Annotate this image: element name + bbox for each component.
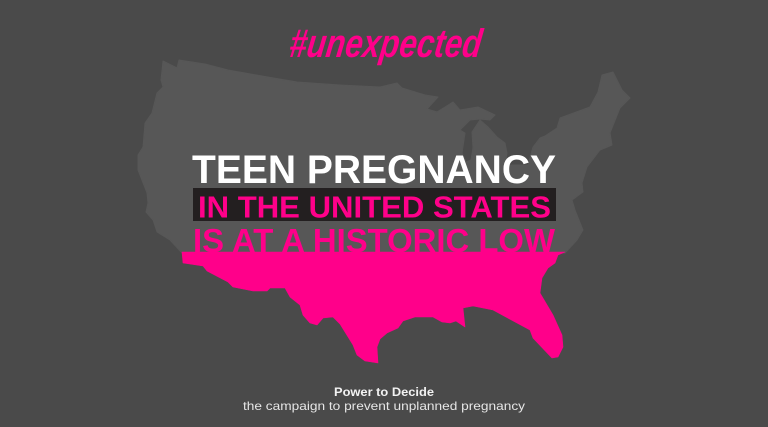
hashtag: #unexpected: #unexpected [287,21,486,66]
organisation name: Power to Decide [334,385,434,399]
headline [192,148,556,259]
map: upper grey region [138,60,630,253]
headline line 3: IS AT A HISTORIC LOW [193,222,556,259]
headline line 2 with dark bar: IN THE UNITED STATES [198,190,551,224]
map: lower pink region [182,252,565,363]
map of the United States [138,60,630,363]
footer credit [243,385,525,413]
headline line 1: TEEN PREGNANCY [192,148,556,192]
campaign tagline: the campaign to prevent unplanned pregnancy [243,399,525,413]
